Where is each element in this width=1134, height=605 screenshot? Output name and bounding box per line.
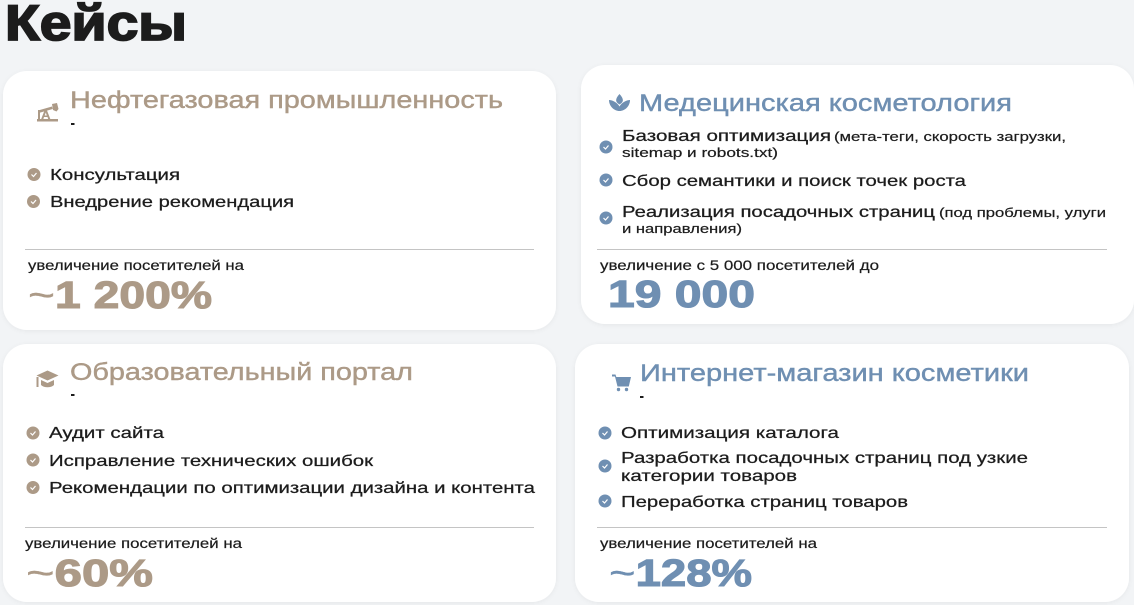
bullet list: (под проблемы, улуги bbox=[939, 206, 1106, 220]
icon: oil pump bbox=[37, 103, 58, 122]
bullet list: Консультация bbox=[50, 167, 180, 184]
icon: graduation cap bbox=[36, 370, 58, 387]
bullet list: Переработка страниц товаров bbox=[621, 494, 908, 511]
bullet list bbox=[600, 128, 1106, 236]
panel: medical cosmetology bbox=[581, 65, 1134, 324]
bullet list: Реализация посадочных страниц bbox=[622, 204, 935, 221]
bullet list bbox=[26, 425, 535, 497]
result number: ~128% bbox=[609, 553, 752, 595]
bullet list: категории товаров bbox=[621, 468, 797, 485]
result label: увеличение посетителей на bbox=[28, 258, 245, 273]
bullet list bbox=[598, 425, 1028, 511]
heading: Интернет-магазин косметики bbox=[640, 360, 1029, 387]
bullet list: Сбор семантики и поиск точек роста bbox=[622, 173, 966, 190]
result number: ~60% bbox=[26, 553, 153, 595]
dash bbox=[640, 396, 644, 398]
result number: ~1 200% bbox=[28, 275, 212, 317]
dash bbox=[71, 123, 74, 125]
icon: lotus bbox=[609, 94, 630, 111]
panel: cosmetics online store bbox=[575, 344, 1129, 602]
bullet list: Базовая оптимизация bbox=[622, 128, 831, 145]
result label: увеличение посетителей на bbox=[600, 536, 818, 551]
bullet list: Оптимизация каталога bbox=[621, 425, 839, 442]
panel: education portal bbox=[3, 344, 556, 602]
heading: Медецинская косметология bbox=[639, 90, 1012, 117]
bullet list: Аудит сайта bbox=[49, 425, 164, 442]
bullet list: (мета-теги, скорость загрузки, bbox=[834, 130, 1066, 144]
bullet list: Рекомендации по оптимизации дизайна и контента bbox=[49, 480, 535, 497]
bullet list: и направления) bbox=[622, 222, 742, 236]
panel: oil and gas bbox=[3, 71, 556, 330]
bullet list: sitemap и robots.txt) bbox=[622, 146, 778, 160]
heading: Образовательный портал bbox=[70, 359, 413, 386]
bullet list: Внедрение рекомендация bbox=[50, 194, 294, 211]
result label: увеличение посетителей на bbox=[25, 536, 243, 551]
bullet list bbox=[27, 167, 294, 211]
heading: Нефтегазовая промышленность bbox=[70, 87, 503, 114]
bullet list: Разработка посадочных страниц под узкие bbox=[621, 450, 1028, 467]
result label: увеличение с 5 000 посетителей до bbox=[600, 258, 879, 273]
dash bbox=[71, 394, 74, 396]
bullet list: Исправление технических ошибок bbox=[49, 453, 374, 470]
icon: cart bbox=[612, 374, 631, 391]
result number: 19 000 bbox=[608, 274, 755, 316]
